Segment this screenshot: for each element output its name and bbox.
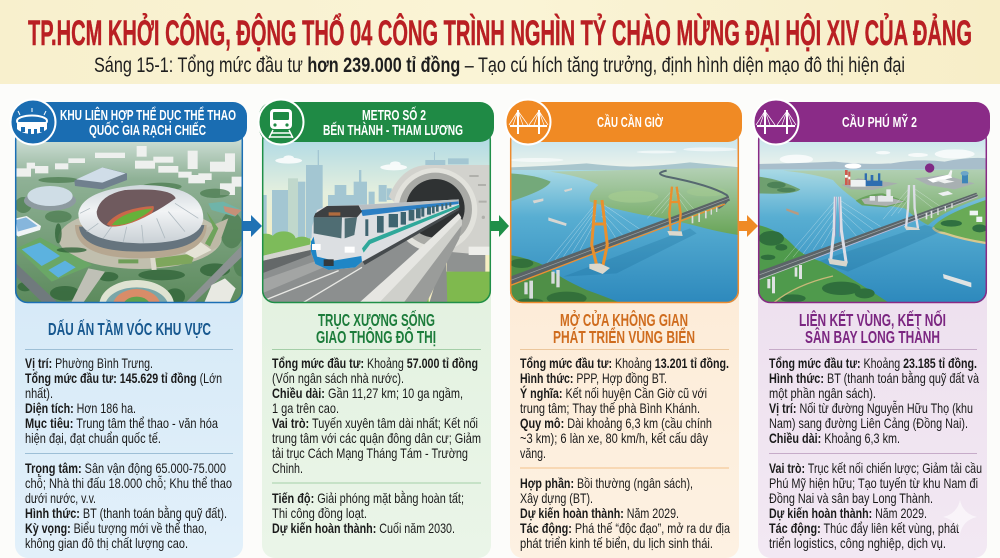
text block: overview	[769, 355, 979, 446]
skyline	[262, 150, 469, 238]
text block: overview: (Vốn ngân sách nhà nước).	[272, 370, 404, 386]
text block: overview: một phần ngân sách).	[769, 385, 876, 401]
airport and airplane	[915, 175, 975, 189]
towers	[592, 200, 607, 267]
towers	[831, 197, 846, 262]
ships	[533, 188, 572, 226]
section heading: DẤU ẤN TẦM VÓC KHU VỰC	[48, 318, 211, 339]
deck	[510, 196, 730, 285]
seating bowl	[97, 189, 176, 227]
text block: overview: tải trục Cách Mạng Tháng Tám - Trường	[272, 445, 468, 461]
icon: bridge	[754, 100, 798, 144]
text block: overview: Chiều dài: Khoảng 6,3 km.	[769, 430, 900, 446]
text block: details: Dự kiến hoàn thành: Năm 2029.	[769, 505, 927, 521]
image: stadium complex	[15, 139, 243, 303]
foreground land	[758, 225, 890, 305]
icon: train	[258, 100, 304, 144]
text block: overview: Quy mô: Dài khoảng 6,3 km (cầu chính	[520, 415, 712, 431]
left bank	[510, 173, 551, 202]
text block: details: Trọng tâm: Sân vận động 65.000-75.000	[25, 460, 226, 476]
text block: overview: Diện tích: Hơn 186 ha.	[25, 400, 136, 416]
train	[311, 199, 459, 270]
text block: overview: Tổng mức đầu tư: Khoảng 13.201 tỉ đồng.	[520, 355, 729, 371]
text block: details	[769, 460, 982, 551]
text block: overview: Ý nghĩa: Kết nối huyện Cần Giờ cũ với	[520, 384, 707, 401]
bottom plaza	[100, 280, 174, 302]
image: metro train and tunnel	[258, 127, 492, 305]
viaduct pier	[430, 264, 448, 302]
stadium roof	[78, 185, 203, 243]
text block: overview: ~3 km); 6 làn xe, 80 km/h, kết cấu dây	[520, 430, 708, 446]
road curve	[660, 171, 728, 208]
header text: CẦU PHÚ MỸ 2	[842, 113, 917, 131]
text block: overview: trung tâm với các quận đông dân cư; Giảm	[272, 430, 481, 446]
text block: progress	[272, 490, 464, 536]
text block: overview: hiện đại, đạt chuẩn quốc tế.	[25, 430, 161, 446]
text block: details: Hình thức: BT (thanh toán bằng quỹ đất).	[25, 505, 227, 521]
text block: overview: Tổng mức đầu tư: 145.629 tỉ đồng (Lớn	[25, 370, 222, 386]
stadium base	[75, 225, 207, 258]
icon: sparkle	[943, 500, 977, 534]
pools	[208, 202, 242, 217]
text block: overview	[520, 355, 729, 461]
header text: METRO SỐ 2	[362, 106, 426, 124]
text block: overview	[272, 355, 481, 476]
bridge shadow	[818, 225, 945, 272]
text block: details: Kỳ vọng: Biểu tượng mới về thể thao,	[25, 520, 207, 536]
text block: details: triển logistics, công nghiệp, dịch vụ.	[769, 535, 946, 551]
arrow: blue to green	[243, 215, 262, 237]
section heading	[553, 309, 695, 347]
header text: QUỐC GIA RẠCH CHIẾC	[89, 121, 206, 139]
section heading: MỞ CỬA KHÔNG GIAN	[560, 309, 688, 330]
header text: CẦU CẦN GIỜ	[597, 113, 663, 131]
header text: KHU LIÊN HỢP THỂ DỤC THỂ THAO	[60, 106, 236, 124]
large hall	[74, 167, 127, 189]
text block: details: không gian đô thị chất lượng cao.	[25, 535, 188, 551]
header text	[60, 106, 236, 139]
header text: BẾN THÀNH - THAM LƯƠNG	[323, 122, 463, 139]
industrial island	[856, 193, 906, 207]
icon: stadium	[10, 100, 56, 144]
foreground land	[510, 255, 625, 305]
text block: overview: Vị trí: Phường Bình Trưng.	[25, 355, 153, 371]
bridge shadow	[563, 228, 697, 277]
text block: overview: Hình thức: PPP, Hợp đồng BT.	[520, 370, 667, 386]
panel: Cầu Cần Giờ	[506, 100, 742, 558]
section heading: TRỤC XƯƠNG SỐNG	[318, 309, 435, 330]
text block: progress: Thi công đồng loạt.	[272, 505, 367, 521]
text block: details: phát triển kinh tế biển, du lịch sinh thái.	[520, 535, 713, 551]
section heading	[316, 309, 436, 347]
text block: overview: Vai trò: Tuyến xuyên tâm dài nhất; Kết nối	[272, 415, 478, 431]
far land	[550, 167, 740, 235]
section heading: SÂN BAY LONG THÀNH	[805, 326, 940, 347]
icon: bridge	[506, 100, 550, 144]
text block: details: chỗ; Nhà thi đấu 18.000 chỗ; Khu thể thao	[25, 475, 232, 491]
text block: details: Tác động: Thúc đẩy liên kết vùng, phát	[769, 520, 959, 536]
text block: overview: văng.	[520, 445, 546, 461]
dome	[24, 196, 76, 210]
text block: progress: Dự kiến hoàn thành: Cuối năm 2030.	[272, 520, 455, 536]
tunnel portal	[389, 165, 492, 255]
header pill	[12, 102, 247, 142]
piers	[524, 207, 717, 299]
header text	[323, 106, 463, 139]
text block: progress: Tiến độ: Giải phóng mặt bằng hoàn tất;	[272, 490, 464, 506]
section heading	[799, 309, 946, 347]
tennis courts	[17, 237, 92, 282]
deck	[758, 193, 978, 279]
panel: Metro số 2	[258, 100, 494, 558]
cables	[784, 188, 940, 261]
image: Can Gio bridge	[510, 127, 740, 305]
text block: details: dưới nước, v.v.	[25, 490, 96, 506]
cables	[547, 190, 694, 263]
plaza ground	[58, 218, 222, 269]
header pill	[259, 102, 494, 142]
tree clusters	[18, 223, 230, 305]
section heading: GIAO THÔNG ĐÔ THỊ	[316, 326, 436, 347]
ground below	[445, 272, 492, 305]
panel: Cầu Phú Mỹ 2	[754, 100, 990, 558]
arrow: orange to purple	[739, 215, 758, 237]
text block: overview: Tổng mức đầu tư: Khoảng 23.185 tỉ đồng.	[769, 355, 977, 371]
text block: details	[25, 460, 232, 551]
text block: overview: Chiều dài: Gần 11,27 km; 10 ga ngầm,	[272, 385, 463, 401]
text block: details: Tác động: Phá thế “độc đạo”, mở ra dư địa	[520, 520, 730, 536]
section heading: PHÁT TRIỂN VÙNG BIỂN	[553, 326, 695, 347]
text block: details: Đồng Nai và sân bay Long Thành.	[769, 490, 933, 506]
text block: details: Hợp phần: Bồi thường (ngân sách),	[520, 475, 693, 491]
far land	[783, 169, 988, 225]
text block: overview: Tổng mức đầu tư: Khoảng 57.000 tỉ đồng	[272, 355, 478, 371]
text block: overview: nhất).	[25, 385, 53, 401]
road right	[186, 246, 242, 302]
image: Phu My 2 bridge	[758, 127, 988, 305]
text block: details: Dự kiến hoàn thành: Năm 2029.	[520, 505, 679, 521]
text block: details	[520, 475, 730, 551]
left island	[758, 177, 800, 194]
panel: Khu liên hợp thể dục thể thao	[10, 100, 250, 558]
viaduct	[359, 215, 462, 305]
header pill	[755, 102, 990, 142]
road left	[16, 264, 56, 302]
ground and tracks	[262, 238, 420, 303]
text block: overview: trung tâm; Thay thế phà Bình Khánh.	[520, 400, 700, 416]
right bank	[933, 199, 988, 243]
bushes	[258, 231, 311, 256]
text block: details: Xây dựng (BT).	[520, 490, 593, 506]
ships	[786, 208, 799, 215]
header pill	[507, 102, 742, 142]
power plant	[841, 178, 898, 190]
piers	[767, 203, 953, 293]
text block: overview: Mục tiêu: Trung tâm thể thao - văn hóa	[25, 415, 218, 431]
text block: overview: Chinh.	[272, 460, 303, 476]
header band	[0, 0, 1000, 84]
arrow: green to orange	[491, 215, 509, 237]
text block: overview	[25, 355, 222, 446]
small blue hall	[16, 216, 41, 237]
text block: overview: 1 ga trên cao.	[272, 400, 339, 416]
